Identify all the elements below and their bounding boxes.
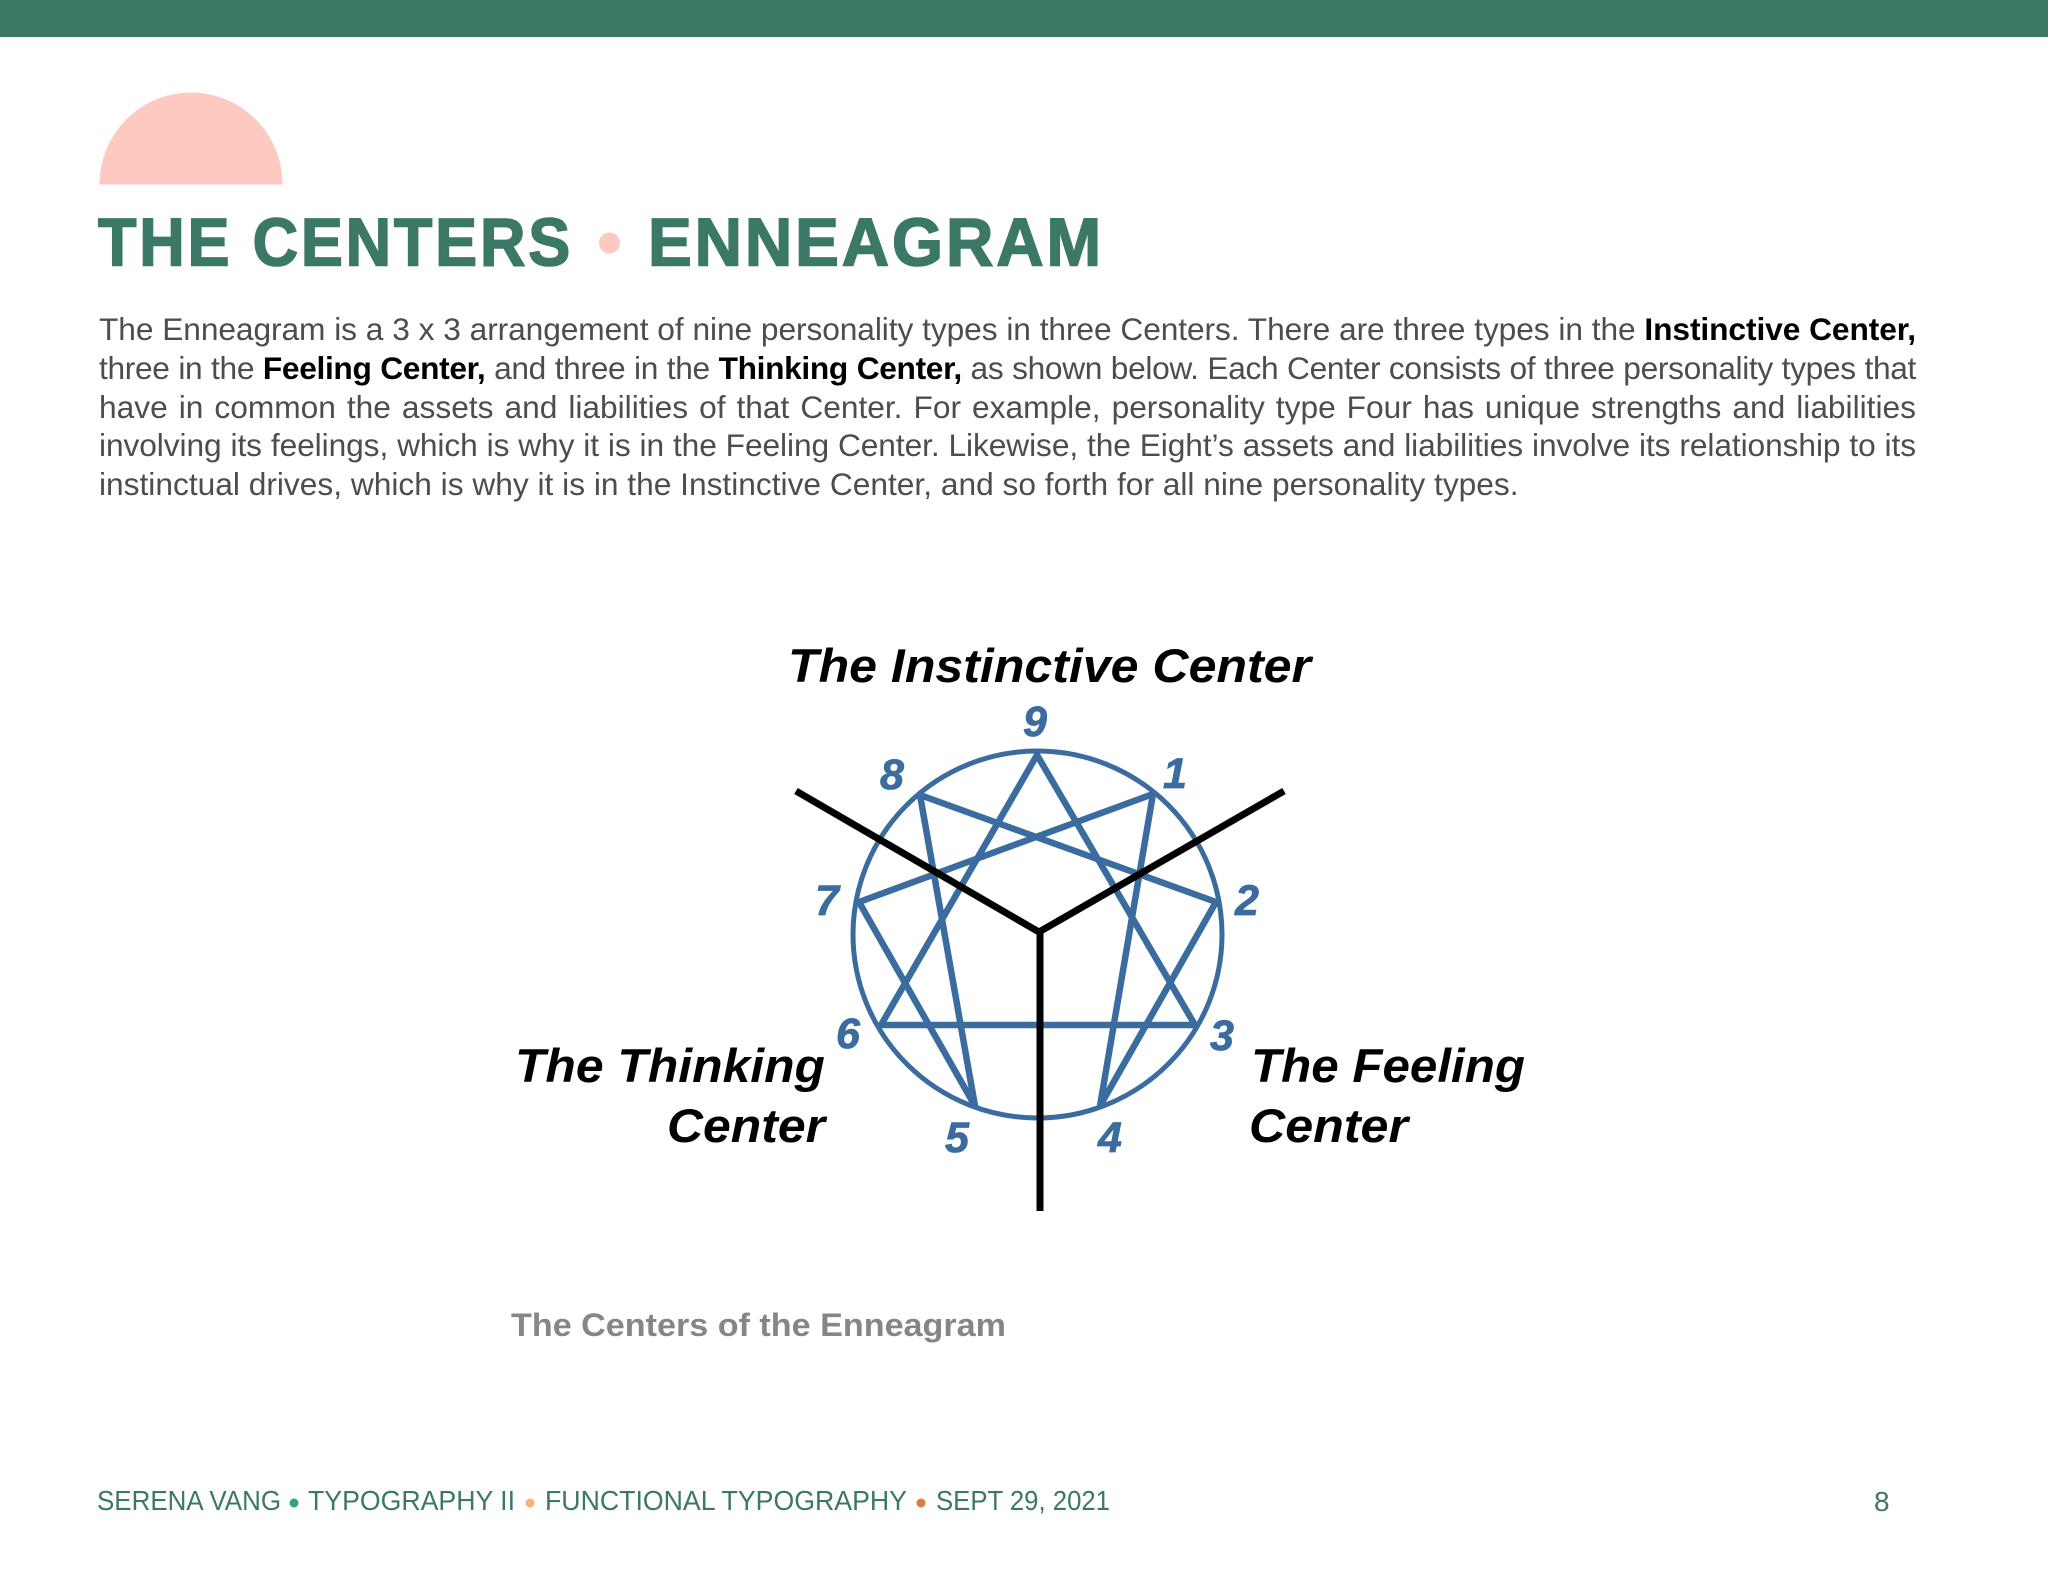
center labels: [515, 639, 1525, 1152]
type numbers: 9: [1023, 698, 1047, 746]
body paragraph: [99, 311, 1916, 502]
diagram caption: The Centers of the Enneagram: [511, 1307, 1006, 1343]
enneagram diagram: [515, 639, 1525, 1211]
center labels: Center: [667, 1099, 828, 1152]
center labels: The Thinking: [515, 1039, 825, 1092]
enneagram circle and inner lines: [853, 751, 1222, 1118]
body paragraph: instinctual drives, which is why it is in the Instinctive Center, and so forth for all nine personality types.: [99, 466, 1519, 502]
decorative pink semicircle: [100, 92, 282, 184]
title: ENNEAGRAM: [648, 204, 1104, 280]
footer: SERENA VANG: [97, 1485, 281, 1516]
top banner: [0, 0, 2048, 37]
center labels: Center: [1249, 1099, 1411, 1152]
type numbers: 5: [945, 1114, 970, 1162]
center labels: The Instinctive Center: [788, 639, 1314, 692]
type numbers: 7: [815, 877, 841, 925]
body paragraph: three in the Feeling Center, and three in the Thinking Center, as shown below. Each Center consists of three personality types that: [99, 350, 1916, 386]
black center dividers: [796, 791, 1284, 1211]
body paragraph: The Enneagram is a 3 x 3 arrangement of nine personality types in three Centers. There are three types in the Instinctive Center,: [99, 311, 1916, 347]
body paragraph: have in common the assets and liabilities of that Center. For example, personality type Four has unique strengths and liabilities: [99, 389, 1916, 425]
type numbers: 1: [1163, 750, 1187, 798]
type numbers: 6: [836, 1010, 861, 1058]
footer: [97, 1485, 1890, 1517]
center labels: The Feeling: [1251, 1039, 1525, 1092]
type numbers: 2: [1234, 877, 1259, 925]
type numbers: 8: [880, 751, 904, 799]
footer: SEPT 29, 2021: [936, 1485, 1110, 1516]
type numbers: [815, 698, 1259, 1162]
title: [98, 204, 1104, 280]
title: THE CENTERS: [98, 204, 573, 280]
body paragraph: involving its feelings, which is why it is in the Feeling Center. Likewise, the Eight’s assets and liabilities involve its relationship to its: [99, 427, 1916, 463]
footer: 8: [1874, 1486, 1890, 1517]
type numbers: 3: [1210, 1012, 1234, 1060]
type numbers: 4: [1097, 1114, 1122, 1162]
footer: FUNCTIONAL TYPOGRAPHY: [545, 1485, 907, 1516]
footer: TYPOGRAPHY II: [308, 1485, 515, 1516]
